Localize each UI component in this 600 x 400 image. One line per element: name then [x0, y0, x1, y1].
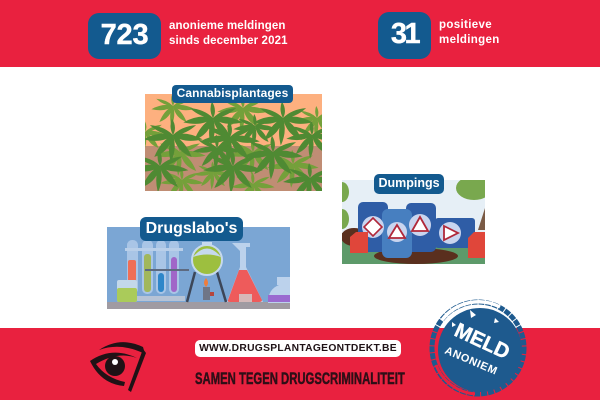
barrels — [358, 202, 475, 252]
purple bottle — [268, 277, 290, 303]
jerrycans — [350, 232, 485, 258]
illustration: cannabis plants — [145, 94, 322, 191]
conical flask — [227, 243, 263, 302]
stat: 31 — [378, 12, 431, 59]
floor — [107, 302, 290, 309]
beaker — [117, 280, 137, 302]
label: Dumpings — [374, 174, 444, 194]
tagline: SAMEN TEGEN DRUGSCRIMINALITEIT — [195, 369, 405, 388]
stamp: meld anoniem — [430, 300, 526, 396]
label: Cannabisplantages: Cannabisplantages — [177, 86, 288, 100]
stamp: meld anoniem: ANONIEM — [443, 345, 499, 378]
hazard signs — [362, 214, 461, 244]
text: anonieme meldingen: anonieme meldingen — [169, 20, 286, 32]
illustration: dumped barrels — [342, 180, 485, 264]
grass — [342, 233, 485, 264]
footer band — [0, 328, 600, 400]
illustration: drug laboratory — [107, 227, 290, 309]
stamp: meld anoniem: MELD — [451, 319, 513, 364]
text: positieve meldingen: positieve — [439, 19, 492, 31]
test tubes — [125, 240, 189, 301]
text: positieve meldingen: meldingen — [439, 34, 500, 46]
header band — [0, 0, 600, 67]
website pill — [195, 340, 401, 357]
stat: 31: 31 — [391, 18, 418, 50]
label: Drugslabo's — [140, 217, 243, 241]
round flask on burner — [187, 242, 226, 302]
website pill: WWW.DRUGSPLANTAGEONTDEKT.BE — [199, 343, 397, 354]
label: Dumpings: Dumpings — [378, 176, 440, 190]
text: anonieme meldingen: sinds december 2021 — [169, 35, 288, 47]
text: positieve meldingen — [439, 19, 500, 46]
label: Drugslabo's: Drugslabo's — [146, 220, 237, 237]
text: anonieme meldingen — [169, 20, 288, 47]
icon: eye — [90, 342, 146, 392]
stat: 723: 723 — [101, 19, 148, 51]
bushes and tree — [335, 176, 492, 229]
stat: 723 — [88, 13, 161, 59]
mud — [341, 228, 458, 264]
